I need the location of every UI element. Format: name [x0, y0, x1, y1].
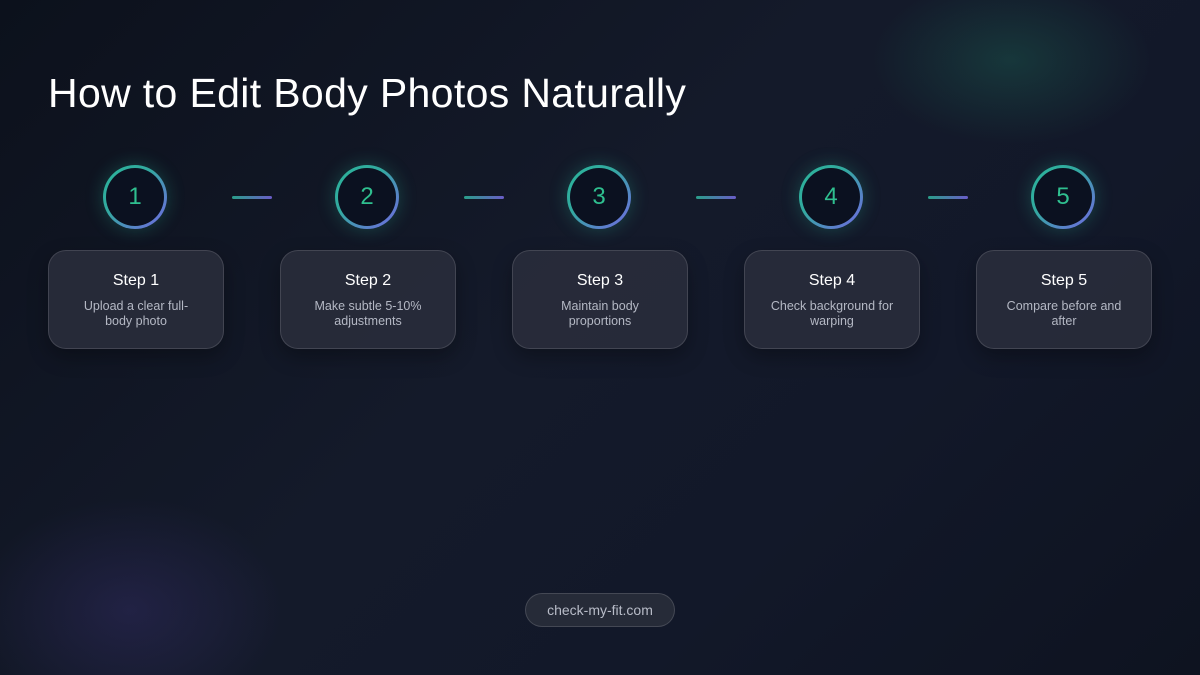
card: step 3 — [512, 250, 688, 349]
card: step 1: Upload a clear full-body photo — [84, 299, 188, 328]
connector 2-3 — [464, 196, 504, 199]
step 1 circle — [103, 165, 167, 229]
footer badge — [525, 593, 675, 627]
card: step 3: Step 3 — [577, 272, 623, 289]
step 4 circle — [799, 165, 863, 229]
card: step 4: Check background for warping — [771, 299, 893, 328]
card: step 5: Compare before and after — [1007, 299, 1121, 328]
card: step 5 — [976, 250, 1152, 349]
step 3 circle: 3 — [592, 183, 606, 210]
step 2 circle: 2 — [360, 183, 374, 210]
step 5 circle: 5 — [1056, 183, 1070, 210]
card: step 4: Step 4 — [809, 272, 855, 289]
step 1 circle: 1 — [128, 183, 142, 210]
step 3 circle — [567, 165, 631, 229]
step 4 circle: 4 — [824, 183, 838, 210]
card: step 3: Maintain body proportions — [561, 299, 639, 328]
step 2 circle — [335, 165, 399, 229]
footer badge: check-my-fit.com — [547, 602, 653, 618]
card: step 5: Step 5 — [1041, 272, 1087, 289]
connector 4-5 — [928, 196, 968, 199]
connector 1-2 — [232, 196, 272, 199]
card: step 1: Step 1 — [113, 272, 159, 289]
card: step 2 — [280, 250, 456, 349]
connector 3-4 — [696, 196, 736, 199]
title: How to Edit Body Photos Naturally — [48, 70, 686, 116]
card: step 1 — [48, 250, 224, 349]
card: step 4 — [744, 250, 920, 349]
step 5 circle — [1031, 165, 1095, 229]
card: step 2: Step 2 — [345, 272, 391, 289]
card: step 2: Make subtle 5-10% adjustments — [314, 299, 422, 328]
